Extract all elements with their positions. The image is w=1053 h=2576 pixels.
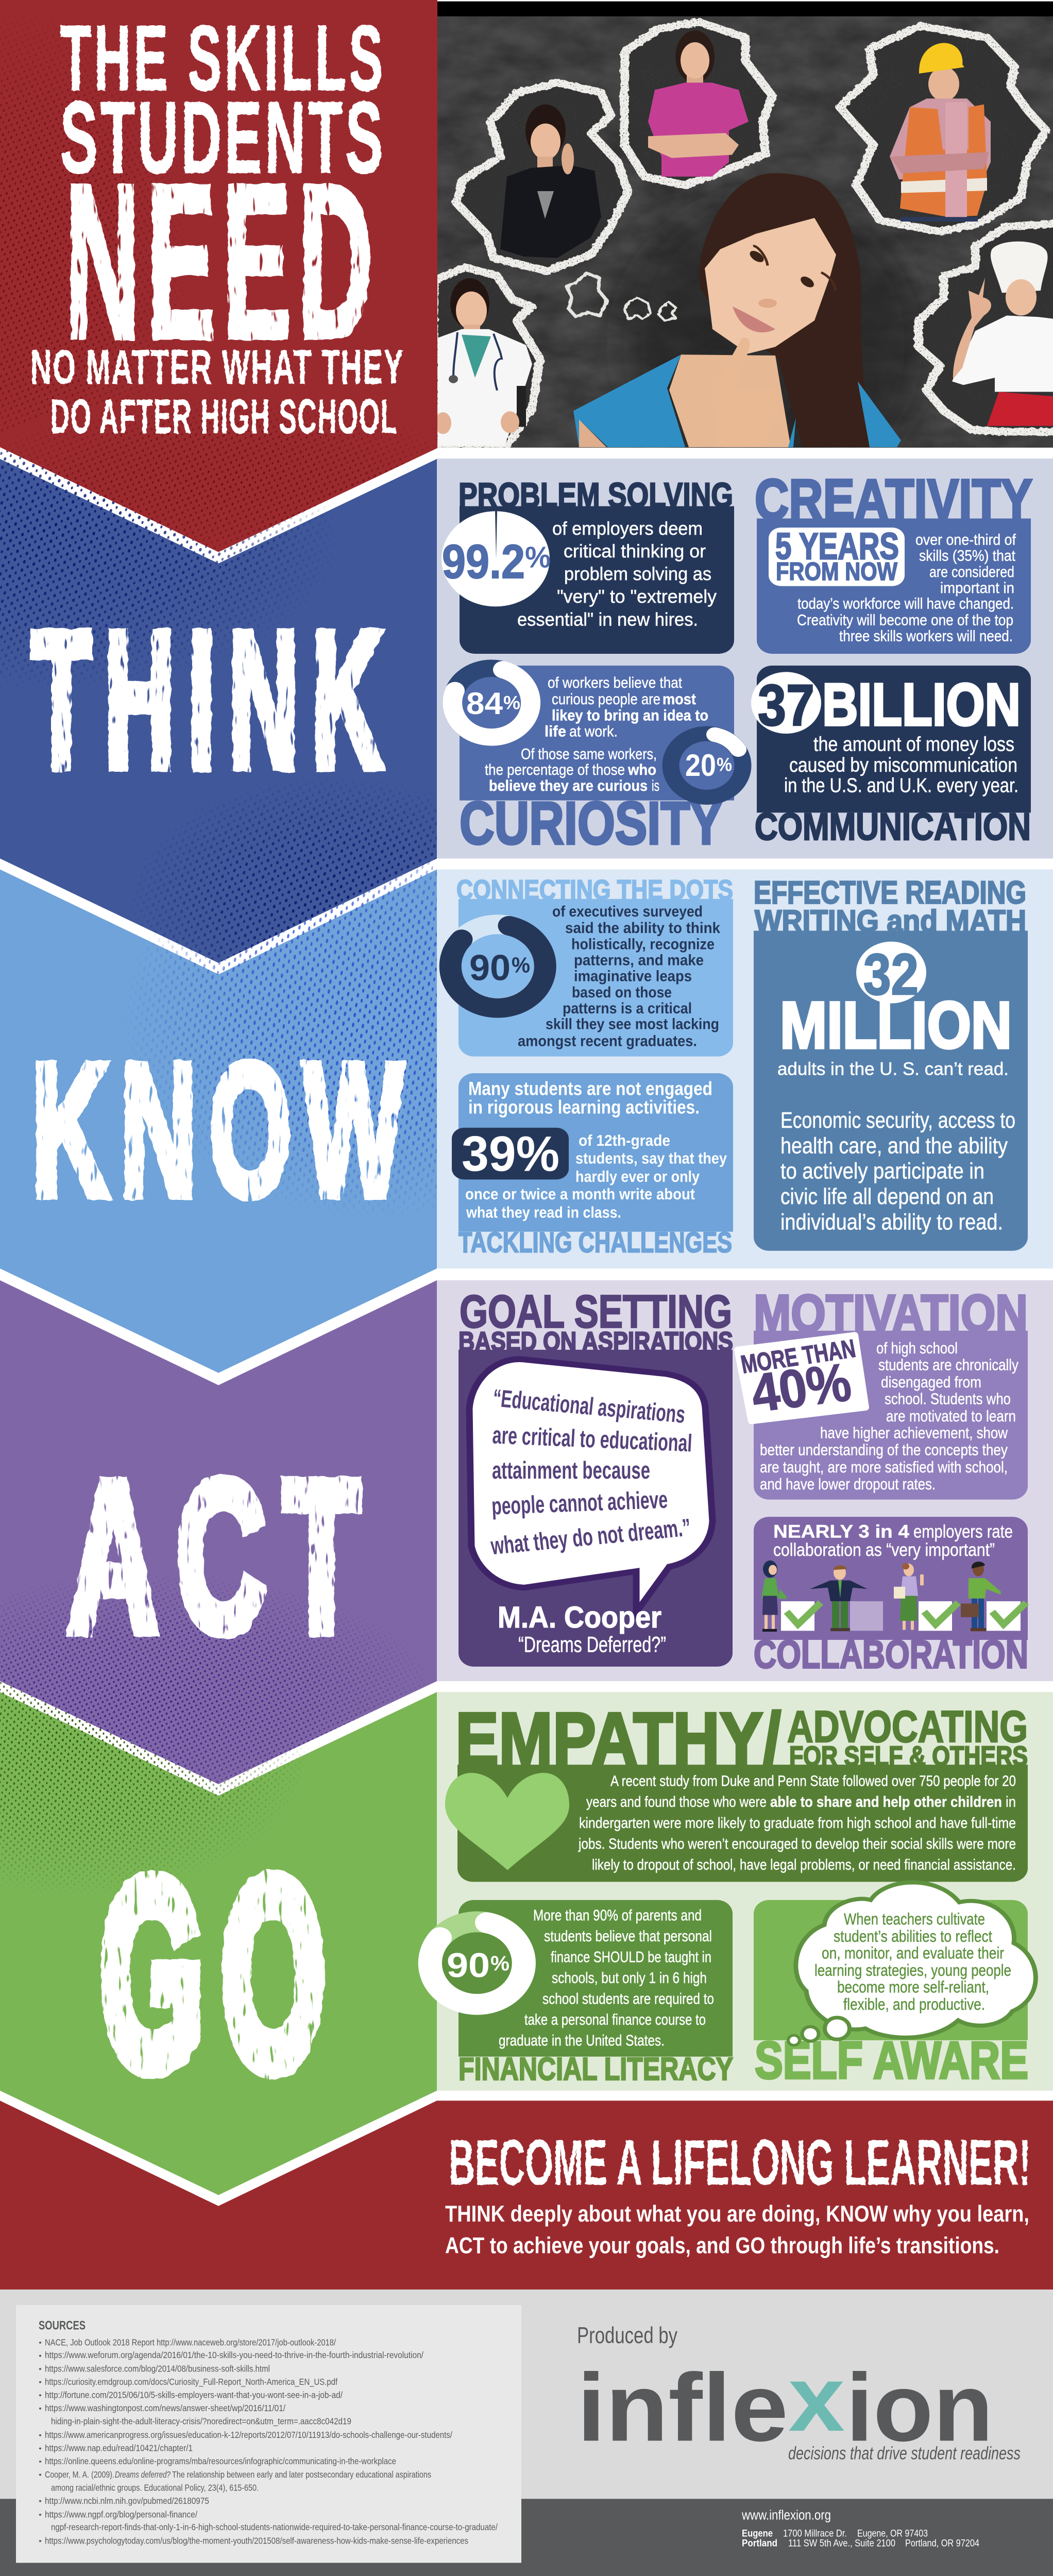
- text: collaboration stat: [773, 1521, 1013, 1560]
- icon: checked box 1: [781, 1601, 821, 1631]
- text: curiosity stat: most: [663, 690, 696, 707]
- text: problem solving stat: of employers deem: [552, 518, 703, 539]
- icon: heart: [445, 1773, 569, 1870]
- heading: curiosity: CURIOSITY: [460, 790, 722, 857]
- text: creativity stat: are considered: [929, 563, 1014, 581]
- panel: know skills: [437, 870, 1053, 1268]
- list: sources: https://www.ngpf.org/blog/personal-finance/: [45, 2509, 198, 2519]
- text: curiosity stat: likey to bring an idea to: [552, 706, 708, 724]
- text: motivation stat: of high school: [876, 1339, 958, 1357]
- list: sources: https://www.nap.edu/read/10421/chapter/1: [45, 2443, 193, 2453]
- text: financial literacy stat: [499, 1906, 714, 2049]
- badge: 5 years from now: 5 YEARS: [775, 526, 899, 567]
- text: economic security: [780, 1108, 1015, 1234]
- logo: inflexion: [577, 2346, 993, 2462]
- list: sources: The relationship between early and later postsecondary educational aspirations: [172, 2469, 431, 2480]
- text: connecting the dots stat: based on those: [572, 984, 672, 1001]
- heading: effective reading, writing and math: [754, 875, 1026, 938]
- text: KNOW: [32, 1024, 416, 1235]
- text: connecting the dots stat: imaginative leaps: [574, 967, 692, 985]
- logo: inflexion: x: [788, 2346, 845, 2450]
- list: sources: https://www.salesforce.com/blog/2014/08/business-soft-skills.html: [45, 2364, 270, 2374]
- text: tackling intro: Many students are not engaged: [468, 1078, 712, 1099]
- heading: problem solving: PROBLEM SOLVING: [458, 476, 733, 515]
- text: contact details: 111 SW 5th Ave., Suite 2100: [788, 2538, 895, 2549]
- text: curiosity stat: believe they are curious: [489, 777, 648, 794]
- text: financial literacy stat: students believe that personal: [544, 1927, 712, 1945]
- text: collaboration stat: NEARLY 3 in 4: [773, 1521, 909, 1541]
- card: communication: [757, 666, 1031, 812]
- chalk cloud: construction worker: [840, 26, 1046, 231]
- text: motivation stat: disengaged from: [881, 1373, 981, 1391]
- figure: doctor: [435, 278, 532, 446]
- list: sources: http://www.ncbi.nlm.nih.gov/pubmed/26180975: [45, 2496, 209, 2506]
- text: produced by: Produced by: [577, 2323, 677, 2348]
- footer background: [0, 2290, 1053, 2576]
- text: contact details: [741, 2507, 979, 2549]
- text: creativity stat: skills (35%) that: [919, 547, 1015, 564]
- chalk cloud: chef: [919, 224, 1053, 432]
- heading: goal setting based on aspirations: GOAL SETTING: [460, 1286, 732, 1337]
- text: curiosity stat: the percentage of those: [485, 761, 625, 778]
- heading: sources: SOURCES: [39, 2319, 86, 2332]
- text: economic security: to actively participate in: [780, 1158, 984, 1183]
- photo: student imagining careers on a chalkboard: [437, 1, 1053, 448]
- text: problem solving stat: problem solving as: [564, 564, 711, 585]
- figure: woman in lilac jacket: [894, 1563, 924, 1630]
- chalk cloud: nurse: [624, 22, 772, 185]
- text: tackling intro: [468, 1078, 712, 1118]
- badge: 5 years from now: FROM NOW: [776, 557, 897, 586]
- text: connecting the dots stat: of executives surveyed: [552, 903, 703, 920]
- stat: 37 billion: 37: [758, 672, 814, 738]
- text: connecting the dots stat: amongst recent graduates.: [518, 1032, 697, 1049]
- list: sources: https://www.americanprogress.org/issues/education-k-12/reports/2012/07/10/11913/do-schools-challenge-our-students/: [45, 2430, 453, 2440]
- text: GO: [100, 1824, 343, 2124]
- list: sources: NACE, Job Outlook 2018 Report http://www.naceweb.org/store/2017/job-outlook-2018/: [45, 2337, 336, 2347]
- speech bubble with quote: what they do not dream.”: [489, 1513, 692, 1560]
- text: connecting the dots stat: patterns is a critical: [563, 999, 692, 1016]
- panel: go skills: [430, 1692, 1053, 2091]
- text: connecting the dots stat: holistically, recognize: [571, 936, 715, 953]
- stat: 32 million: [780, 942, 1012, 1062]
- text: financial literacy stat: finance SHOULD be taught in: [551, 1948, 711, 1965]
- chalk cloud: doctor: [434, 267, 540, 444]
- text: connecting the dots stat: patterns, and make: [574, 951, 704, 969]
- stat: 37 billion: [751, 671, 1021, 738]
- figure: man with briefcase: [961, 1562, 1001, 1631]
- text: tackling stat: students, say that they: [575, 1149, 727, 1167]
- text: motivation stat: school. Students who: [885, 1390, 1011, 1408]
- label: ACT: ACT: [69, 1437, 378, 1675]
- text: problem solving stat: "very" to "extremely: [557, 586, 717, 607]
- banner: title chevron: [0, 0, 437, 552]
- text: creativity stat: important in: [940, 579, 1014, 596]
- heading: tackling challenges: TACKLING CHALLENGES: [458, 1226, 732, 1259]
- text: contact details: Eugene: [742, 2528, 773, 2539]
- text: contact details: Eugene, OR 97403: [857, 2528, 928, 2539]
- banner: GO chevron: [0, 1681, 437, 2195]
- text: connecting the dots stat: said the ability to think: [565, 919, 720, 936]
- list: sources: https://curiosity.emdgroup.com/docs/Curiosity_Full-Report_North-America_EN_US.pdf: [45, 2377, 338, 2387]
- text: empathy study: years and found those who were: [586, 1793, 767, 1810]
- figure: woman in green jacket: [761, 1561, 787, 1632]
- card: effective reading: [754, 930, 1028, 1251]
- banner: THINK chevron: [0, 447, 437, 963]
- donut: 90% parents: %: [490, 1952, 509, 1975]
- thought cloud: [788, 1883, 1035, 2045]
- donut: 20%: %: [717, 754, 732, 775]
- text: curiosity stat: who: [627, 761, 656, 778]
- text: communication stat: [784, 733, 1018, 796]
- panel: become a lifelong learner: [0, 2100, 1053, 2290]
- text: DO AFTER HIGH SCHOOL: [50, 390, 398, 444]
- text: connecting the dots stat: skill they see most lacking: [546, 1015, 719, 1032]
- text: motivation stat: and have lower dropout rates.: [760, 1475, 936, 1493]
- text: problem solving stat: essential" in new hires.: [517, 609, 698, 630]
- panel: sources: [16, 2305, 521, 2563]
- list: sources: Dreams deferred?: [115, 2469, 171, 2480]
- card: financial literacy: [458, 1900, 733, 2057]
- list: sources: https://online.queens.edu/online-programs/mba/resources/infographic/communicating-in-the-workplace: [45, 2456, 396, 2466]
- pie: 99.2%: [441, 511, 551, 606]
- text: empathy study: [578, 1773, 1016, 1873]
- donut: 90% executives: 90: [469, 947, 511, 988]
- card: goal setting: [458, 1350, 733, 1667]
- heading: goal setting based on aspirations: [458, 1286, 733, 1357]
- speech bubble with quote: attainment because: [492, 1456, 650, 1484]
- speech bubble with quote: “Educational aspirations: [491, 1384, 687, 1428]
- list: sources: [45, 2337, 498, 2546]
- text: NEED: [65, 140, 380, 383]
- panel: act skills: [437, 1280, 1053, 1681]
- text: call to action: [445, 2201, 1029, 2258]
- donut: 90% executives: %: [512, 953, 530, 977]
- text: THINK: [32, 591, 396, 807]
- text: curiosity stat: of workers believe that: [548, 674, 682, 691]
- title: [30, 6, 404, 444]
- text: financial literacy stat: More than 90% of parents and: [533, 1906, 702, 1924]
- text: empathy study: in: [1006, 1793, 1016, 1810]
- text: creativity stat: [797, 531, 1016, 645]
- attribution: M.A. Cooper: [498, 1601, 661, 1634]
- panel: think skills: [437, 459, 1053, 858]
- list bullets: [39, 2342, 41, 2542]
- badge: more than 40%: MORE THAN: [739, 1334, 858, 1379]
- heading: connecting the dots: CONNECTING THE DOTS: [456, 875, 733, 906]
- badge: more than 40%: 40%: [747, 1351, 855, 1423]
- text: contact details: www.inflexion.org: [741, 2507, 831, 2522]
- list: sources: hiding-in-plain-sight-the-adult-literacy-crisis/?noredirect=on&utm_term=.aacc8c042d19: [51, 2416, 351, 2427]
- text: financial literacy stat: schools, but only 1 in 6 high: [552, 1969, 707, 1987]
- donut: 20%: 20: [685, 748, 716, 783]
- icon: empty box: [850, 1601, 883, 1631]
- donut: 84%: [452, 668, 531, 737]
- text: contact details: Portland, OR 97204: [905, 2538, 979, 2549]
- speech bubble with quote: are critical to educational: [491, 1421, 693, 1457]
- stat: 32 million: 32: [863, 942, 919, 1007]
- text: tackling stat: [465, 1131, 727, 1221]
- donut: 90% parents: [430, 1922, 524, 2005]
- thought cloud: flexible, and productive.: [843, 1995, 985, 2014]
- text: problem solving stat: [517, 518, 717, 630]
- thought cloud: When teachers cultivate: [844, 1910, 985, 1928]
- chalk cloud: business woman: [456, 82, 628, 271]
- list: sources: http://fortune.com/2015/06/10/5-skills-employers-want-that-you-wont-see-in-a-job-ad/: [45, 2390, 343, 2400]
- list: sources: https://www.psychologytoday.com/us/blog/the-moment-youth/201508/self-awareness-how-kids-make-sense-life-experiences: [45, 2536, 468, 2546]
- donut: 90% parents: 90: [447, 1946, 490, 1985]
- figure: construction worker: [890, 43, 991, 222]
- heading: advocating for self and others: [787, 1702, 1028, 1772]
- text: tackling stat: of 12th-grade: [579, 1131, 670, 1149]
- figure: nurse in pink scrubs: [648, 30, 749, 177]
- speech bubble with quote: [469, 1359, 712, 1612]
- text: financial literacy stat: graduate in the United States.: [499, 2032, 665, 2049]
- heading: financial literacy: FINANCIAL LITERACY: [458, 2051, 733, 2087]
- thought cloud: student’s abilities to reflect: [834, 1927, 992, 1945]
- heading: empathy: EMPATHY/: [455, 1697, 781, 1782]
- text: tackling intro: in rigorous learning activities.: [468, 1097, 700, 1118]
- card: problem solving: [460, 506, 734, 654]
- title: NO MATTER WHAT THEY: [30, 341, 404, 394]
- pie: 99.2%: %: [525, 541, 551, 574]
- card: empathy: [457, 1765, 1028, 1882]
- list: sources: https://www.weforum.org/agenda/2016/01/the-10-skills-you-need-to-thrive-in-the-fourth-industrial-revolution/: [45, 2350, 424, 2360]
- text: tackling stat: what they read in class.: [466, 1203, 621, 1221]
- text: curiosity stat: curious people are: [552, 690, 660, 707]
- icon: checked box 3: [987, 1601, 1026, 1631]
- card: collaboration: [754, 1517, 1028, 1640]
- attribution: “Dreams Deferred?”: [518, 1632, 666, 1657]
- card: tackling challenges: [458, 1073, 733, 1232]
- text: curiosity stat: Of those same workers,: [521, 745, 657, 762]
- donut: 84%: %: [503, 692, 520, 714]
- banner: KNOW chevron: [0, 858, 437, 1373]
- text: financial literacy stat: school students are required to: [542, 1990, 714, 2007]
- donut: 20%: [671, 734, 743, 797]
- text: creativity stat: over one-third of: [915, 531, 1016, 548]
- banner: ACT chevron: [0, 1268, 437, 1784]
- text: curiosity stat: life: [545, 722, 566, 740]
- text: curiosity stat: is: [652, 777, 659, 794]
- card: self aware: [754, 1900, 1028, 2040]
- logo: inflexion: infle: [577, 2354, 788, 2462]
- card: connecting the dots: [458, 899, 733, 1057]
- donut: 84%: 84: [466, 686, 503, 721]
- card: curiosity: [460, 666, 734, 801]
- text: contact details: 1700 Millrace Dr.: [783, 2528, 847, 2539]
- list: sources: Cooper, M. A. (2009).: [45, 2469, 114, 2480]
- badge: 5 years from now: [769, 526, 905, 586]
- chalk clouds: small thought bubbles: [567, 273, 676, 320]
- text: contact details: Portland: [742, 2538, 777, 2549]
- card: motivation: [754, 1331, 1028, 1500]
- text: adults cannot read: adults in the U. S. can’t read.: [777, 1059, 1009, 1079]
- card: creativity: [757, 518, 1031, 654]
- list: sources: among racial/ethnic groups. Educational Policy, 23(4), 615-650.: [51, 2482, 259, 2493]
- speech bubble with quote: people cannot achieve: [491, 1486, 668, 1520]
- pie: 99.2%: 99.2: [442, 535, 525, 588]
- text: problem solving stat: critical thinking or: [564, 541, 706, 562]
- figure: business woman with phone: [500, 105, 601, 258]
- icon: checked box 2: [919, 1601, 958, 1631]
- text: motivation stat: [760, 1339, 1018, 1493]
- figure: main student with chin on finger: [573, 173, 901, 447]
- text: connecting the dots stat: [518, 903, 720, 1049]
- text: curiosity stat: at work.: [569, 722, 618, 740]
- figure: chef: [952, 242, 1053, 426]
- list: sources: https://www.washingtonpost.com/news/answer-sheet/wp/2016/11/01/: [45, 2403, 286, 2413]
- text: tackling stat: hardly ever or only: [575, 1167, 700, 1185]
- text: financial literacy stat: take a personal finance course to: [524, 2011, 706, 2028]
- title: STUDENTS: [60, 80, 386, 194]
- donut: 90% executives: [450, 924, 545, 1008]
- text: curiosity stat: [485, 674, 708, 794]
- title: THE SKILLS: [60, 6, 386, 110]
- heading: goal setting based on aspirations: BASED ON ASPIRATIONS: [458, 1327, 733, 1357]
- badge: 39%: 39%: [462, 1126, 559, 1181]
- text: tackling stat: once or twice a month write about: [465, 1185, 695, 1203]
- text: collaboration stat: employers rate: [913, 1521, 1013, 1541]
- thought cloud: become more self-reliant,: [837, 1978, 989, 1996]
- figure: man in navy suit: [810, 1565, 868, 1631]
- logo: inflexion: ion: [846, 2354, 993, 2462]
- list: sources: ngpf-research-report-finds-that-only-1-in-6-high-school-students-nationwide-required-to-take-personal-finance-course-to-graduate/: [51, 2522, 498, 2532]
- attribution: [498, 1601, 666, 1657]
